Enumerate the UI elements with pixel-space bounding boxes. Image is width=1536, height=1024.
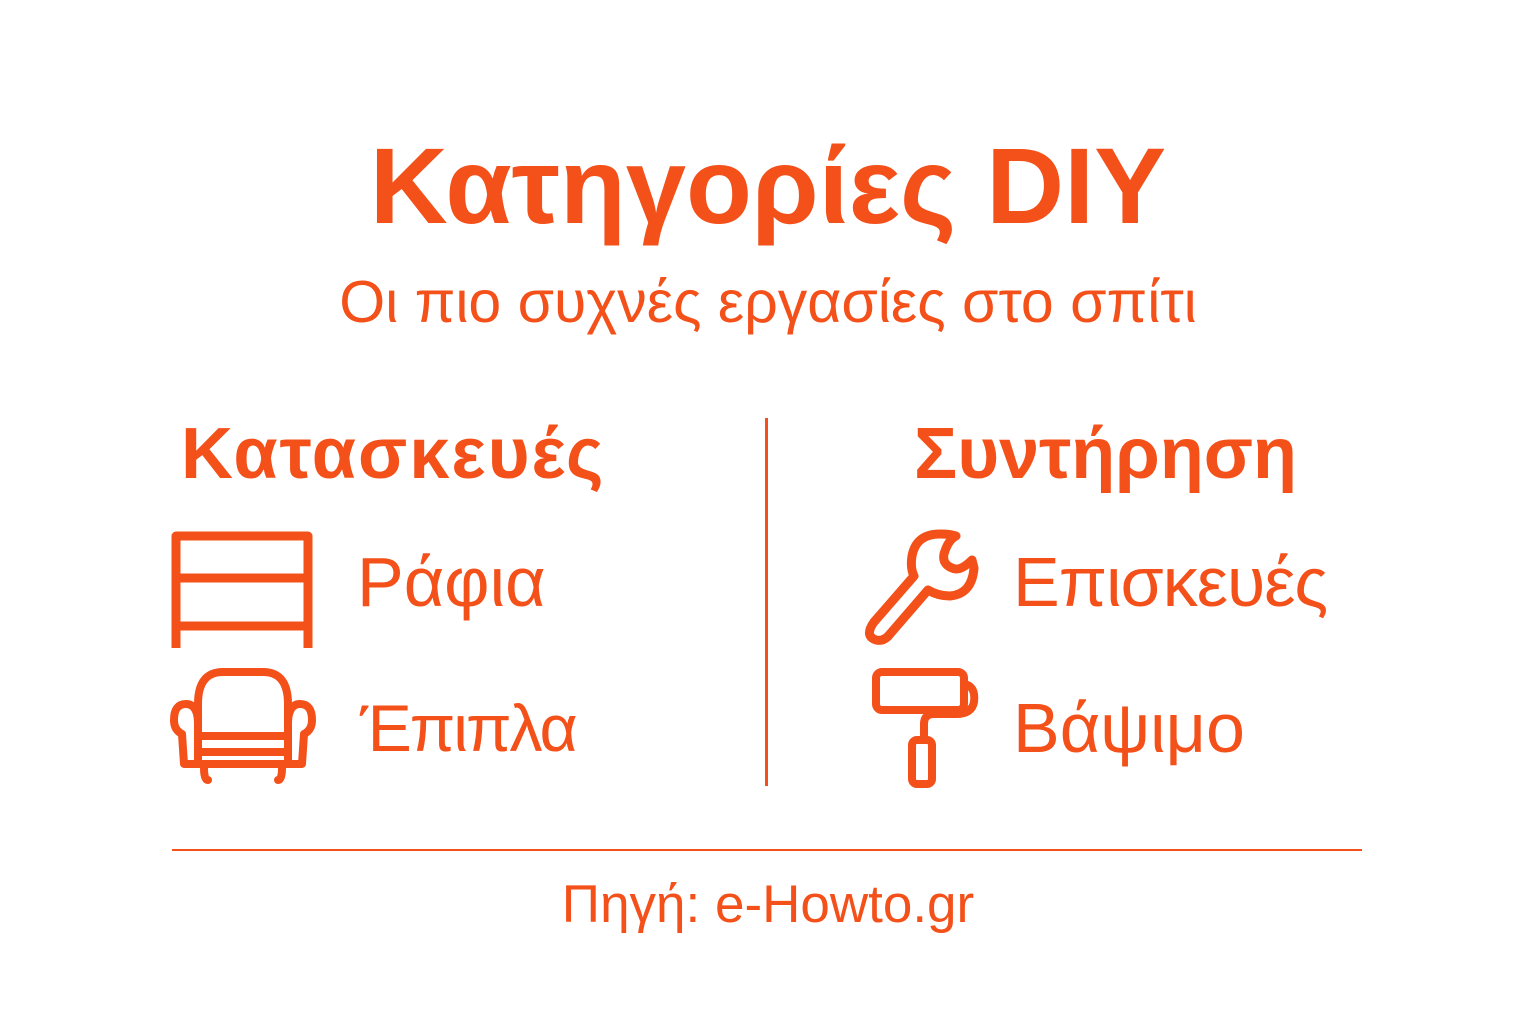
horizontal divider xyxy=(172,849,1362,851)
icon: shelf xyxy=(172,532,312,648)
heading: Κατασκευές: Κατασκευές xyxy=(181,414,605,494)
vertical divider xyxy=(765,418,768,786)
label: Επισκευές: Επισκευές xyxy=(1013,543,1327,621)
icon: wrench xyxy=(864,530,978,645)
icon: armchair xyxy=(170,668,316,784)
title: Κατηγορίες DIY xyxy=(370,125,1166,246)
label: Έπιπλα: Έπιπλα xyxy=(360,691,576,765)
label: Ράφια: Ράφια xyxy=(357,543,546,621)
subtitle: Οι πιο συχνές εργασίες στο σπίτι xyxy=(339,269,1197,335)
source: Πηγή: e-Howto.gr xyxy=(562,875,974,934)
icon: paint roller xyxy=(872,668,978,788)
heading: Συντήρηση: Συντήρηση xyxy=(914,414,1297,494)
label: Βάψιμο: Βάψιμο xyxy=(1013,689,1245,767)
